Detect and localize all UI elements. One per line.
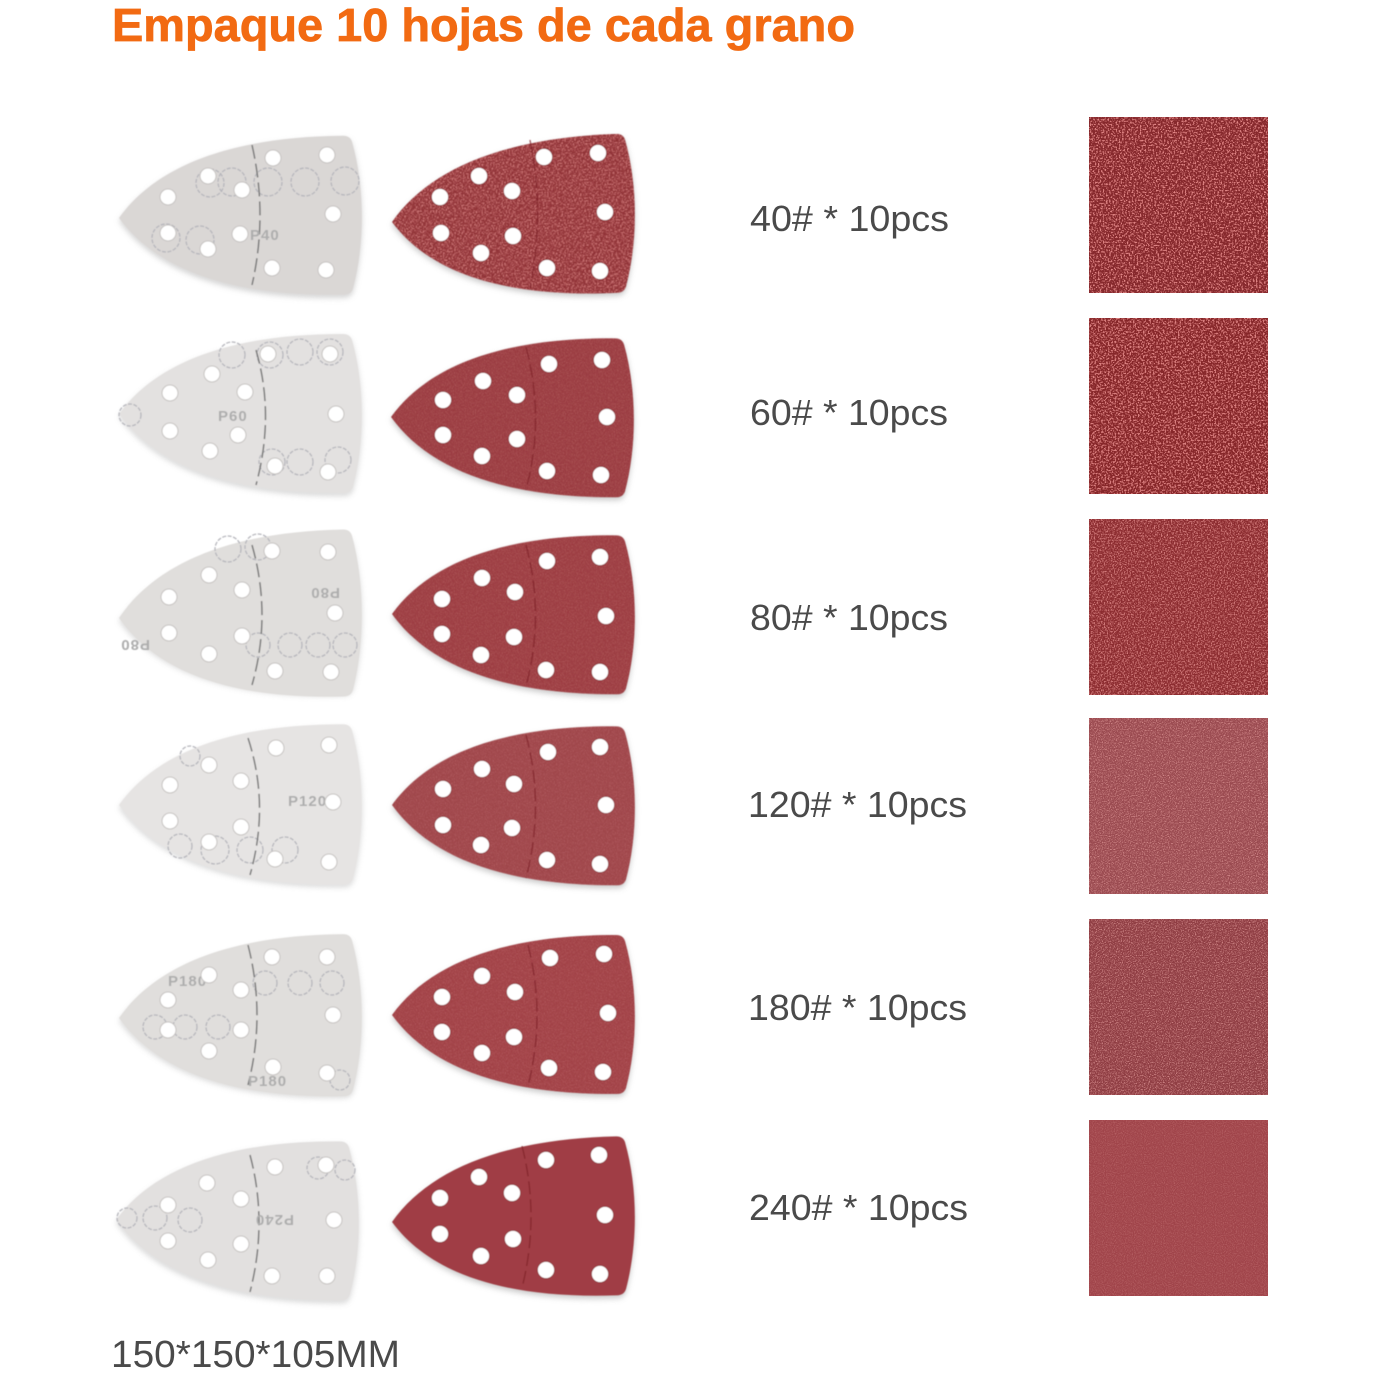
backing sheet P60	[119, 334, 362, 496]
backing sheet P80: P80	[120, 636, 150, 653]
texture swatch 60 grit	[1089, 318, 1268, 494]
abrasive sheet 180	[392, 935, 635, 1097]
row: 180 grit	[119, 919, 1268, 1100]
texture swatch 40 grit	[1089, 117, 1268, 293]
label 80 grit: 80# * 10pcs	[750, 597, 948, 638]
row: 80 grit	[119, 519, 1268, 701]
backing sheet P40	[119, 136, 362, 300]
row: 120 grit	[119, 718, 1268, 894]
label 120 grit: 120# * 10pcs	[748, 784, 967, 825]
row: 40 grit	[119, 117, 1268, 304]
abrasive sheet 60	[391, 337, 634, 500]
texture swatch 80 grit	[1089, 519, 1268, 695]
label 180 grit: 180# * 10pcs	[748, 987, 967, 1028]
backing sheet P80: P80	[310, 584, 340, 601]
texture swatch 240 grit	[1089, 1120, 1268, 1296]
texture swatch 180 grit	[1089, 919, 1268, 1095]
backing sheet P180: P180	[168, 973, 207, 990]
backing sheet P40: P40	[250, 227, 280, 244]
size caption: 150*150*105MM	[111, 1334, 400, 1376]
label 40 grit: 40# * 10pcs	[750, 198, 949, 239]
abrasive sheet 120	[392, 725, 635, 888]
row: 240 grit	[116, 1120, 1268, 1304]
row: 60 grit	[119, 318, 1268, 500]
abrasive sheet 40	[392, 133, 635, 304]
label 240 grit: 240# * 10pcs	[749, 1187, 968, 1228]
backing sheet P120	[119, 724, 362, 887]
backing sheet P240	[116, 1140, 359, 1303]
backing sheet P240: P240	[255, 1211, 294, 1228]
backing sheet P180: P180	[248, 1073, 287, 1090]
backing sheet P80	[119, 529, 362, 701]
abrasive sheet 80	[392, 534, 635, 697]
title: Empaque 10 hojas de cada grano	[112, 0, 855, 51]
backing sheet P60: P60	[218, 408, 248, 425]
texture swatch 120 grit	[1089, 718, 1268, 894]
backing sheet P180	[119, 934, 362, 1100]
abrasive sheet 240	[392, 1136, 635, 1304]
backing sheet P120: P120	[288, 793, 327, 810]
label 60 grit: 60# * 10pcs	[750, 392, 948, 433]
